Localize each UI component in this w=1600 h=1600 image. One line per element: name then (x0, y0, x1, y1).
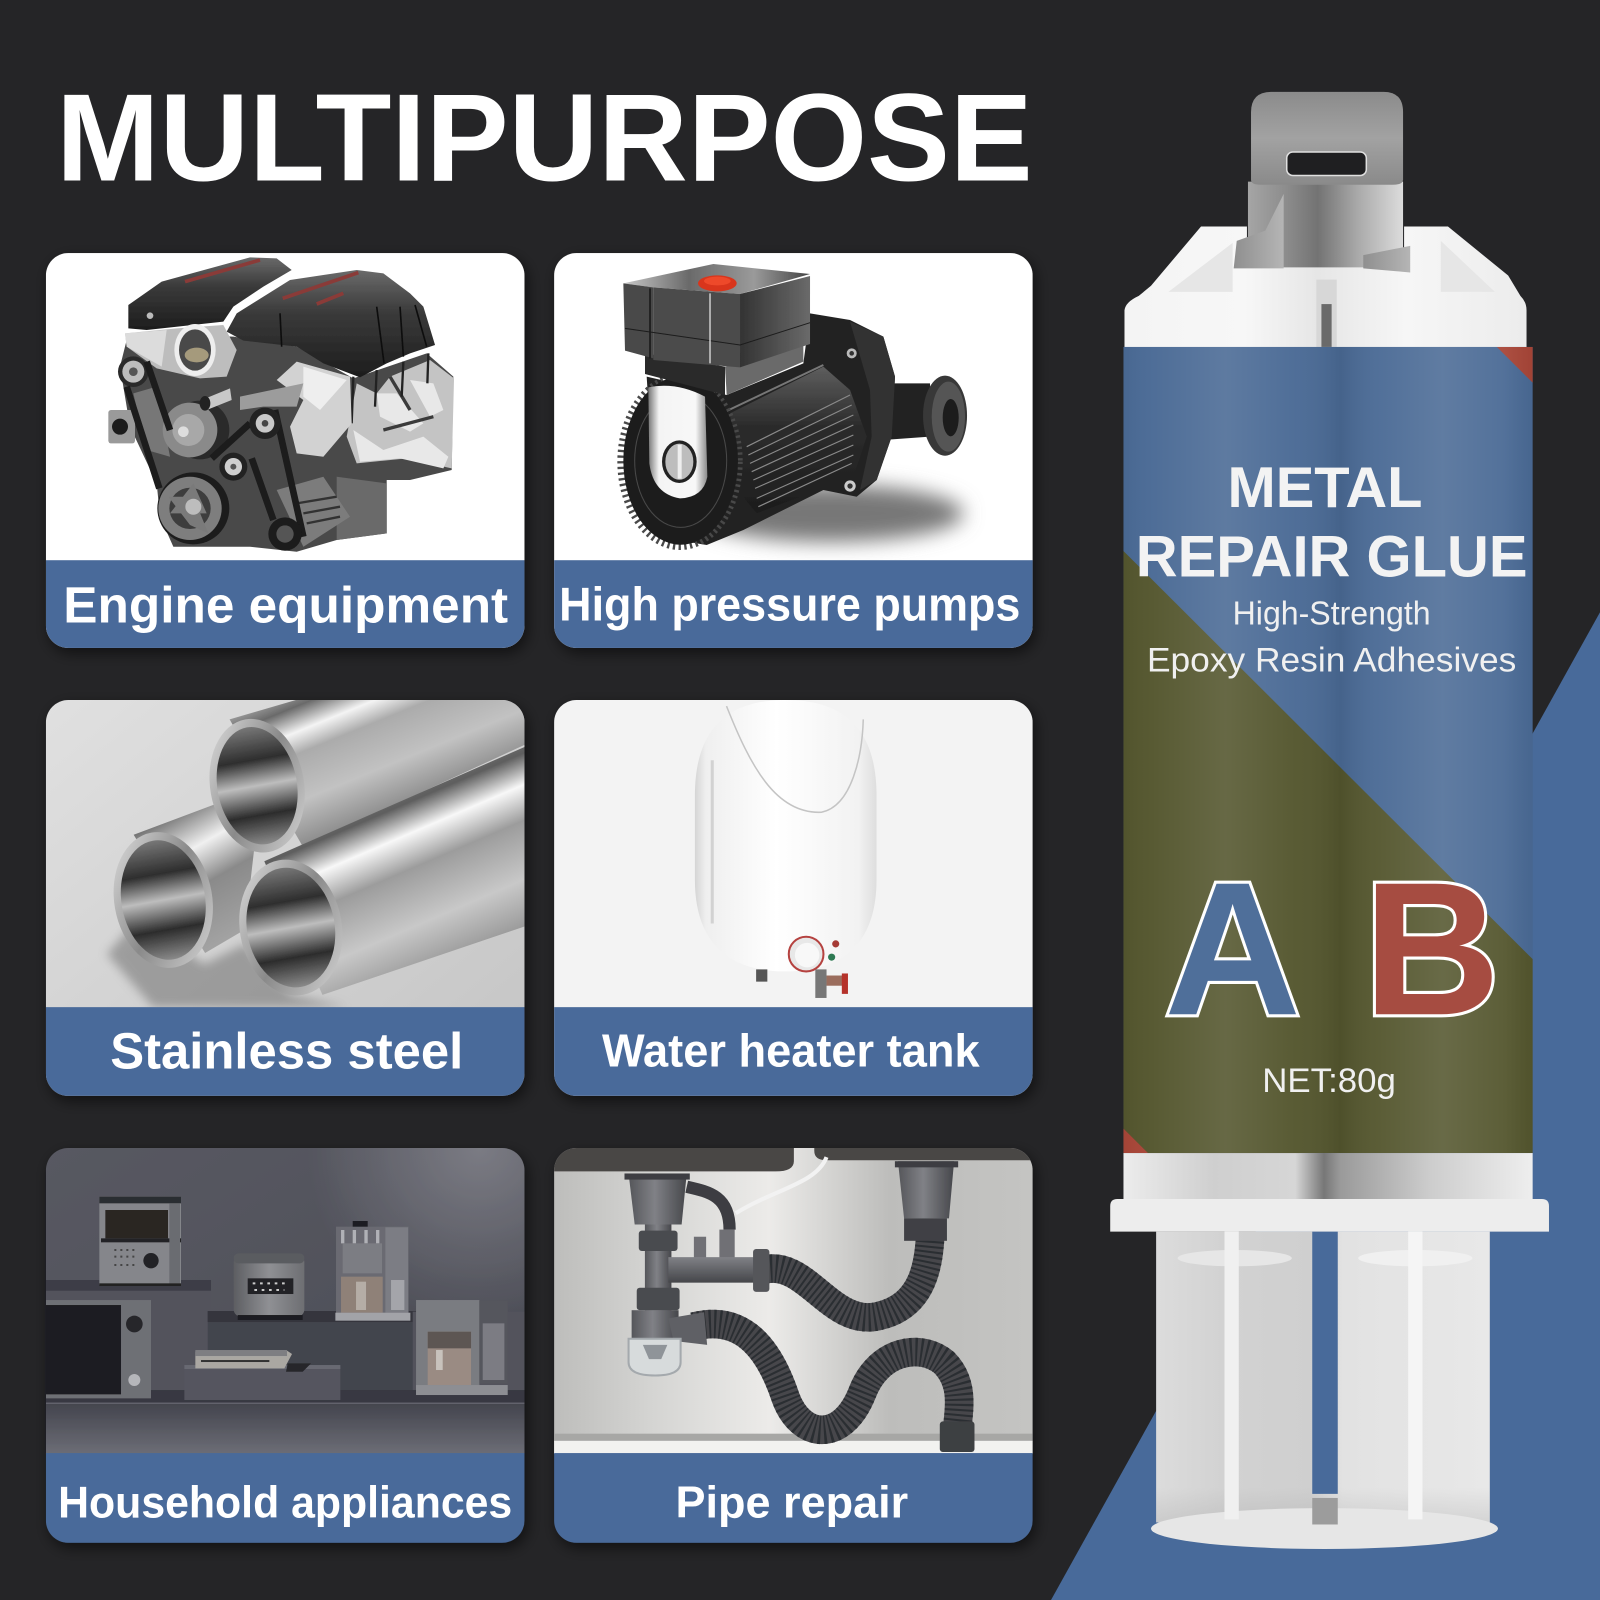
collar and flange (1110, 1153, 1549, 1232)
product name: METAL (1228, 456, 1422, 520)
label: REPAIR GLUE (1136, 525, 1528, 590)
letter A: A (1164, 843, 1301, 1055)
caption bar (554, 1007, 1033, 1096)
caption bar (46, 1007, 524, 1096)
caption: engine equipment: Engine equipment (63, 576, 508, 633)
illustration: circulation pump (621, 264, 967, 547)
caption: high pressure pumps: High pressure pumps (559, 578, 1020, 630)
nozzle cap (1248, 92, 1403, 273)
plunger barrel (1151, 1232, 1498, 1549)
panel: high pressure pumps (554, 253, 1033, 648)
caption: pipe repair: Pipe repair (676, 1476, 908, 1527)
blue diagonal background shape (1051, 612, 1600, 1600)
caption bar (46, 560, 524, 648)
illustration: water heater (695, 700, 877, 998)
shoulder (1124, 194, 1527, 349)
caption bar (554, 1453, 1033, 1543)
label: Epoxy Resin Adhesives (1147, 641, 1516, 679)
panel: water heater tank (554, 700, 1033, 1096)
net weight: NET:80g (1262, 1062, 1396, 1100)
caption: household appliances: Household appliances (58, 1476, 512, 1527)
product subtitle: High-Strength (1233, 595, 1431, 632)
caption bar (554, 560, 1033, 648)
product: glue cartridge (1110, 92, 1549, 1549)
illustration: steel tubes (103, 700, 524, 1007)
caption bar (46, 1453, 524, 1543)
title: MULTIPURPOSE (56, 69, 1033, 208)
panel: household appliances (46, 1148, 526, 1543)
illustration: sink drain pipes (554, 1148, 1033, 1454)
illustration: kitchen appliances on steps (46, 1197, 526, 1454)
letter B: B (1363, 843, 1500, 1055)
label (1123, 347, 1533, 1153)
panel: stainless steel (46, 700, 524, 1096)
caption: stainless steel: Stainless steel (110, 1022, 463, 1079)
panel: pipe repair (554, 1148, 1033, 1543)
illustration: car engine (108, 257, 454, 552)
caption: water heater tank: Water heater tank (602, 1024, 980, 1076)
panel: engine equipment (46, 253, 524, 648)
